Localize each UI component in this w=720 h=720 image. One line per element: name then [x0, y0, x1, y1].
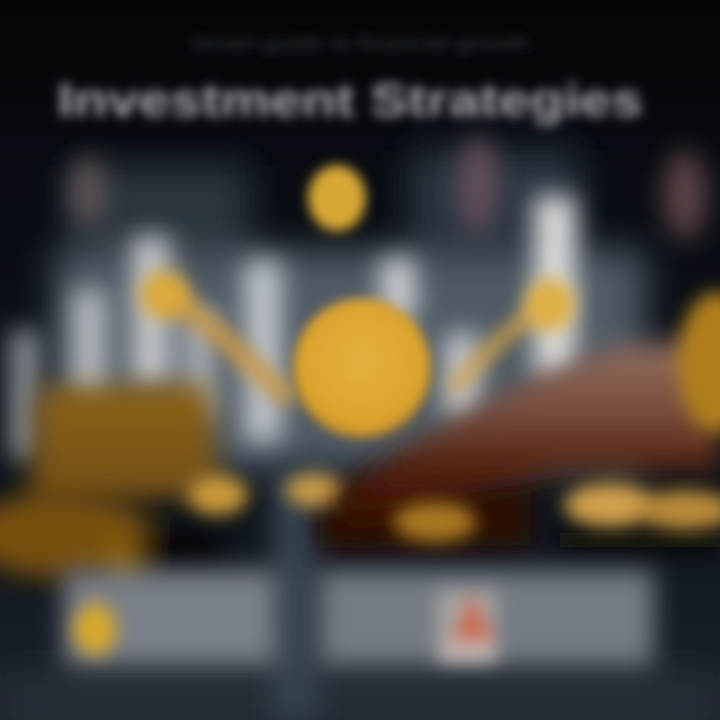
centre divider column [272, 470, 318, 720]
title: Investment Strategies [58, 74, 642, 126]
panel: bottom left card [64, 570, 278, 666]
hand [285, 292, 720, 550]
coin at fingertips [393, 502, 477, 542]
coins under hand [285, 473, 345, 507]
chart gold markers [140, 271, 575, 331]
bar chart [10, 196, 576, 460]
icon: bottom right chart [437, 590, 497, 662]
gold coins right [564, 483, 720, 530]
gold coin highlight left [188, 475, 248, 515]
gold block [30, 384, 220, 505]
gold coins left [0, 493, 230, 593]
hand shape [335, 340, 720, 522]
icon: small gold coin [308, 165, 366, 231]
upper chart hints [70, 137, 707, 240]
subtitle: Smart guide to financial growth [190, 33, 530, 55]
gold stack left [0, 384, 248, 593]
hand shadow [320, 490, 720, 550]
chart backdrop panel [0, 150, 720, 720]
large gold coin right [678, 292, 720, 432]
icon: bottom left gold coin [74, 603, 116, 655]
chart trend line [170, 295, 550, 395]
panel: bottom right card [318, 570, 654, 666]
icon: large gold coin [293, 298, 431, 438]
